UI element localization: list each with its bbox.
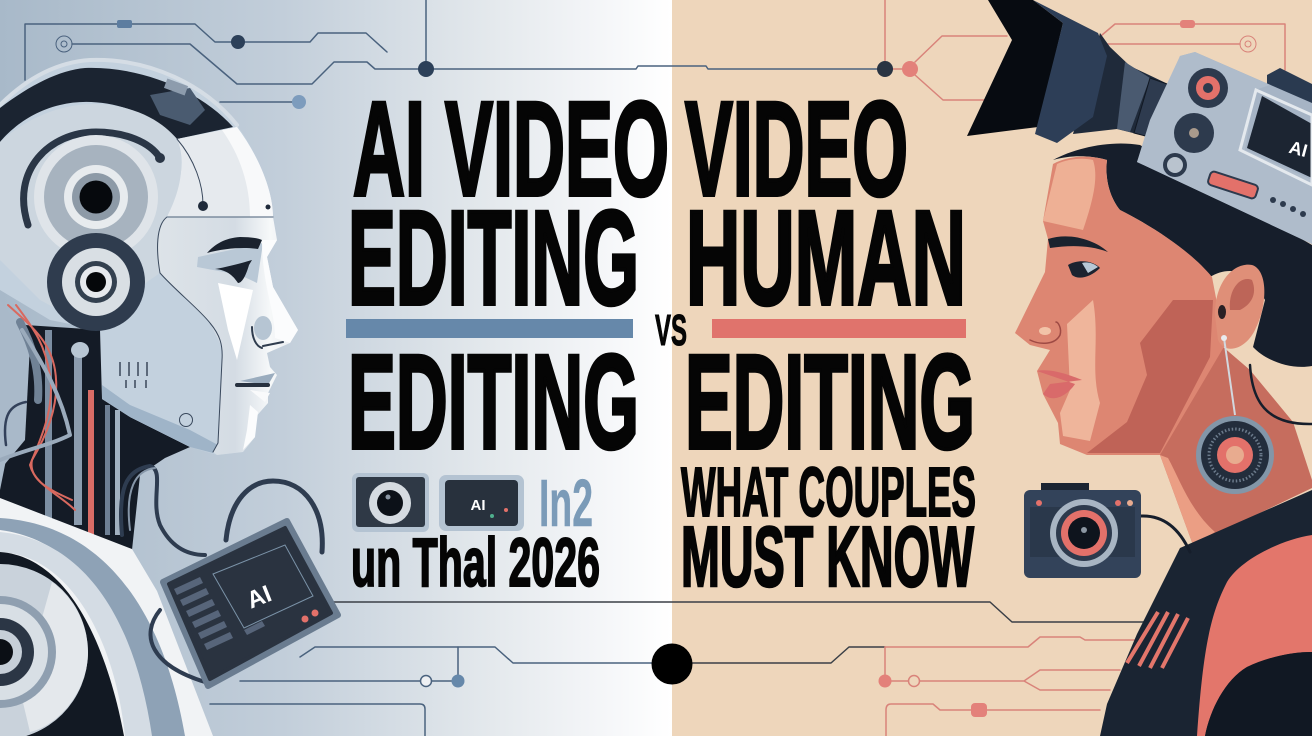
robot nose and lips (237, 327, 283, 402)
center node (652, 644, 692, 684)
video camera on head: AI (1287, 137, 1310, 161)
heading line: AI VIDEO: AI VIDEO (353, 75, 669, 224)
title: left column (346, 75, 669, 601)
woman clothing (1100, 490, 1312, 736)
subheading: MUST KNOW: MUST KNOW (681, 510, 974, 605)
woman face (1015, 157, 1225, 455)
robot tablet (150, 481, 338, 686)
heading line: HUMAN: HUMAN (686, 184, 966, 333)
divider bar: coral (712, 319, 966, 338)
label: un Thal 2026: un Thal 2026 (351, 524, 600, 601)
AI device icon chip (439, 475, 524, 531)
woman brow and eye (1048, 236, 1108, 278)
AI device icon chip: AI (470, 497, 486, 514)
robot large ear disc (24, 132, 165, 259)
robot skull and face (0, 60, 298, 455)
vs label: VS (655, 306, 687, 355)
heading line: VIDEO: VIDEO (685, 75, 908, 224)
robot shoulder (0, 498, 213, 736)
background: human side (672, 0, 1312, 736)
circuit lines: top left (25, 0, 885, 109)
circuit lines: top right (877, 0, 1285, 100)
video camera on head (967, 0, 1312, 244)
woman nose and lips (1030, 322, 1082, 398)
robot neck and wires (0, 300, 205, 555)
robot brow and eye (207, 237, 262, 283)
robot head illustration (0, 60, 338, 736)
human woman illustration (967, 0, 1312, 736)
heading line: EDITING right: EDITING (685, 328, 975, 477)
woman neck and hair back (1053, 143, 1312, 545)
title: right column (681, 75, 976, 605)
subheading: WHAT COUPLES: WHAT COUPLES (681, 453, 976, 531)
small camera (1024, 483, 1190, 578)
woman ear and earring (1196, 265, 1274, 494)
tablet AI label: AI (243, 580, 275, 614)
circuit lines: bottom (210, 602, 1150, 736)
robot vent (120, 362, 147, 388)
heading line: EDITING: EDITING (348, 184, 639, 333)
divider bar: blue (346, 319, 633, 338)
background: AI side (0, 0, 672, 736)
camera icon chip (352, 473, 429, 532)
robot small ear disc (47, 233, 145, 331)
heading line: EDITING second: EDITING (348, 328, 639, 477)
label: In2: In2 (539, 466, 593, 541)
